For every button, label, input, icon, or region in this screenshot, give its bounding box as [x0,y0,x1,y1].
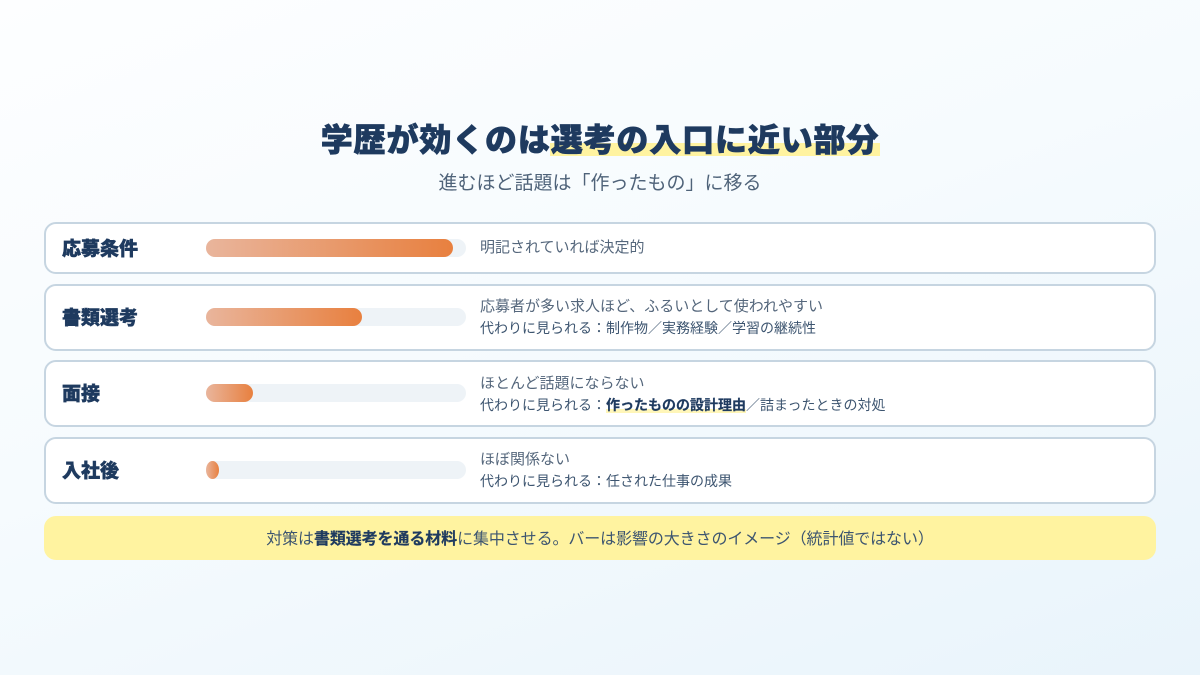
text: 面接: ほとんど話題にならない [480,375,645,392]
callout [44,516,1156,560]
text: 面接: 代わりに見られる：作ったものの設計理由／詰まったときの対処 [480,397,885,413]
panel: 応募条件 [44,222,1156,274]
text: 応募条件: 明記されていれば決定的 [480,239,645,256]
text: 入社後: 代わりに見られる：任された仕事の成果 [480,473,732,489]
bar: 入社後 [206,461,466,479]
text: 入社後: ほぼ関係ない [480,451,570,468]
title: 学歴が効くのは選考の入口に近い部分 [321,122,879,158]
text: 面接 [480,375,885,413]
panel: 入社後 [44,437,1156,504]
bar: 面接 [206,384,466,402]
callout: 対策は書類選考を通る材料に集中させる。バーは影響の大きさのイメージ（統計値ではない） [266,531,934,548]
panel: 面接 [44,360,1156,427]
text: 書類選考 [480,298,823,336]
bar: 書類選考 [206,308,466,326]
bar: 応募条件 [206,239,466,257]
text: 書類選考: 代わりに見られる：制作物／実務経験／学習の継続性 [480,320,816,336]
title highlight [550,143,880,156]
panel: 書類選考 [44,284,1156,351]
label: 書類選考: 書類選考 [62,308,138,329]
text: 入社後 [480,451,732,489]
label: 入社後: 入社後 [62,461,119,482]
subtitle: 進むほど話題は「作ったもの」に移る [438,173,762,194]
label: 応募条件: 応募条件 [62,239,138,260]
text: 書類選考: 応募者が多い求人ほど、ふるいとして使われやすい [480,298,823,315]
label: 面接: 面接 [62,384,100,405]
